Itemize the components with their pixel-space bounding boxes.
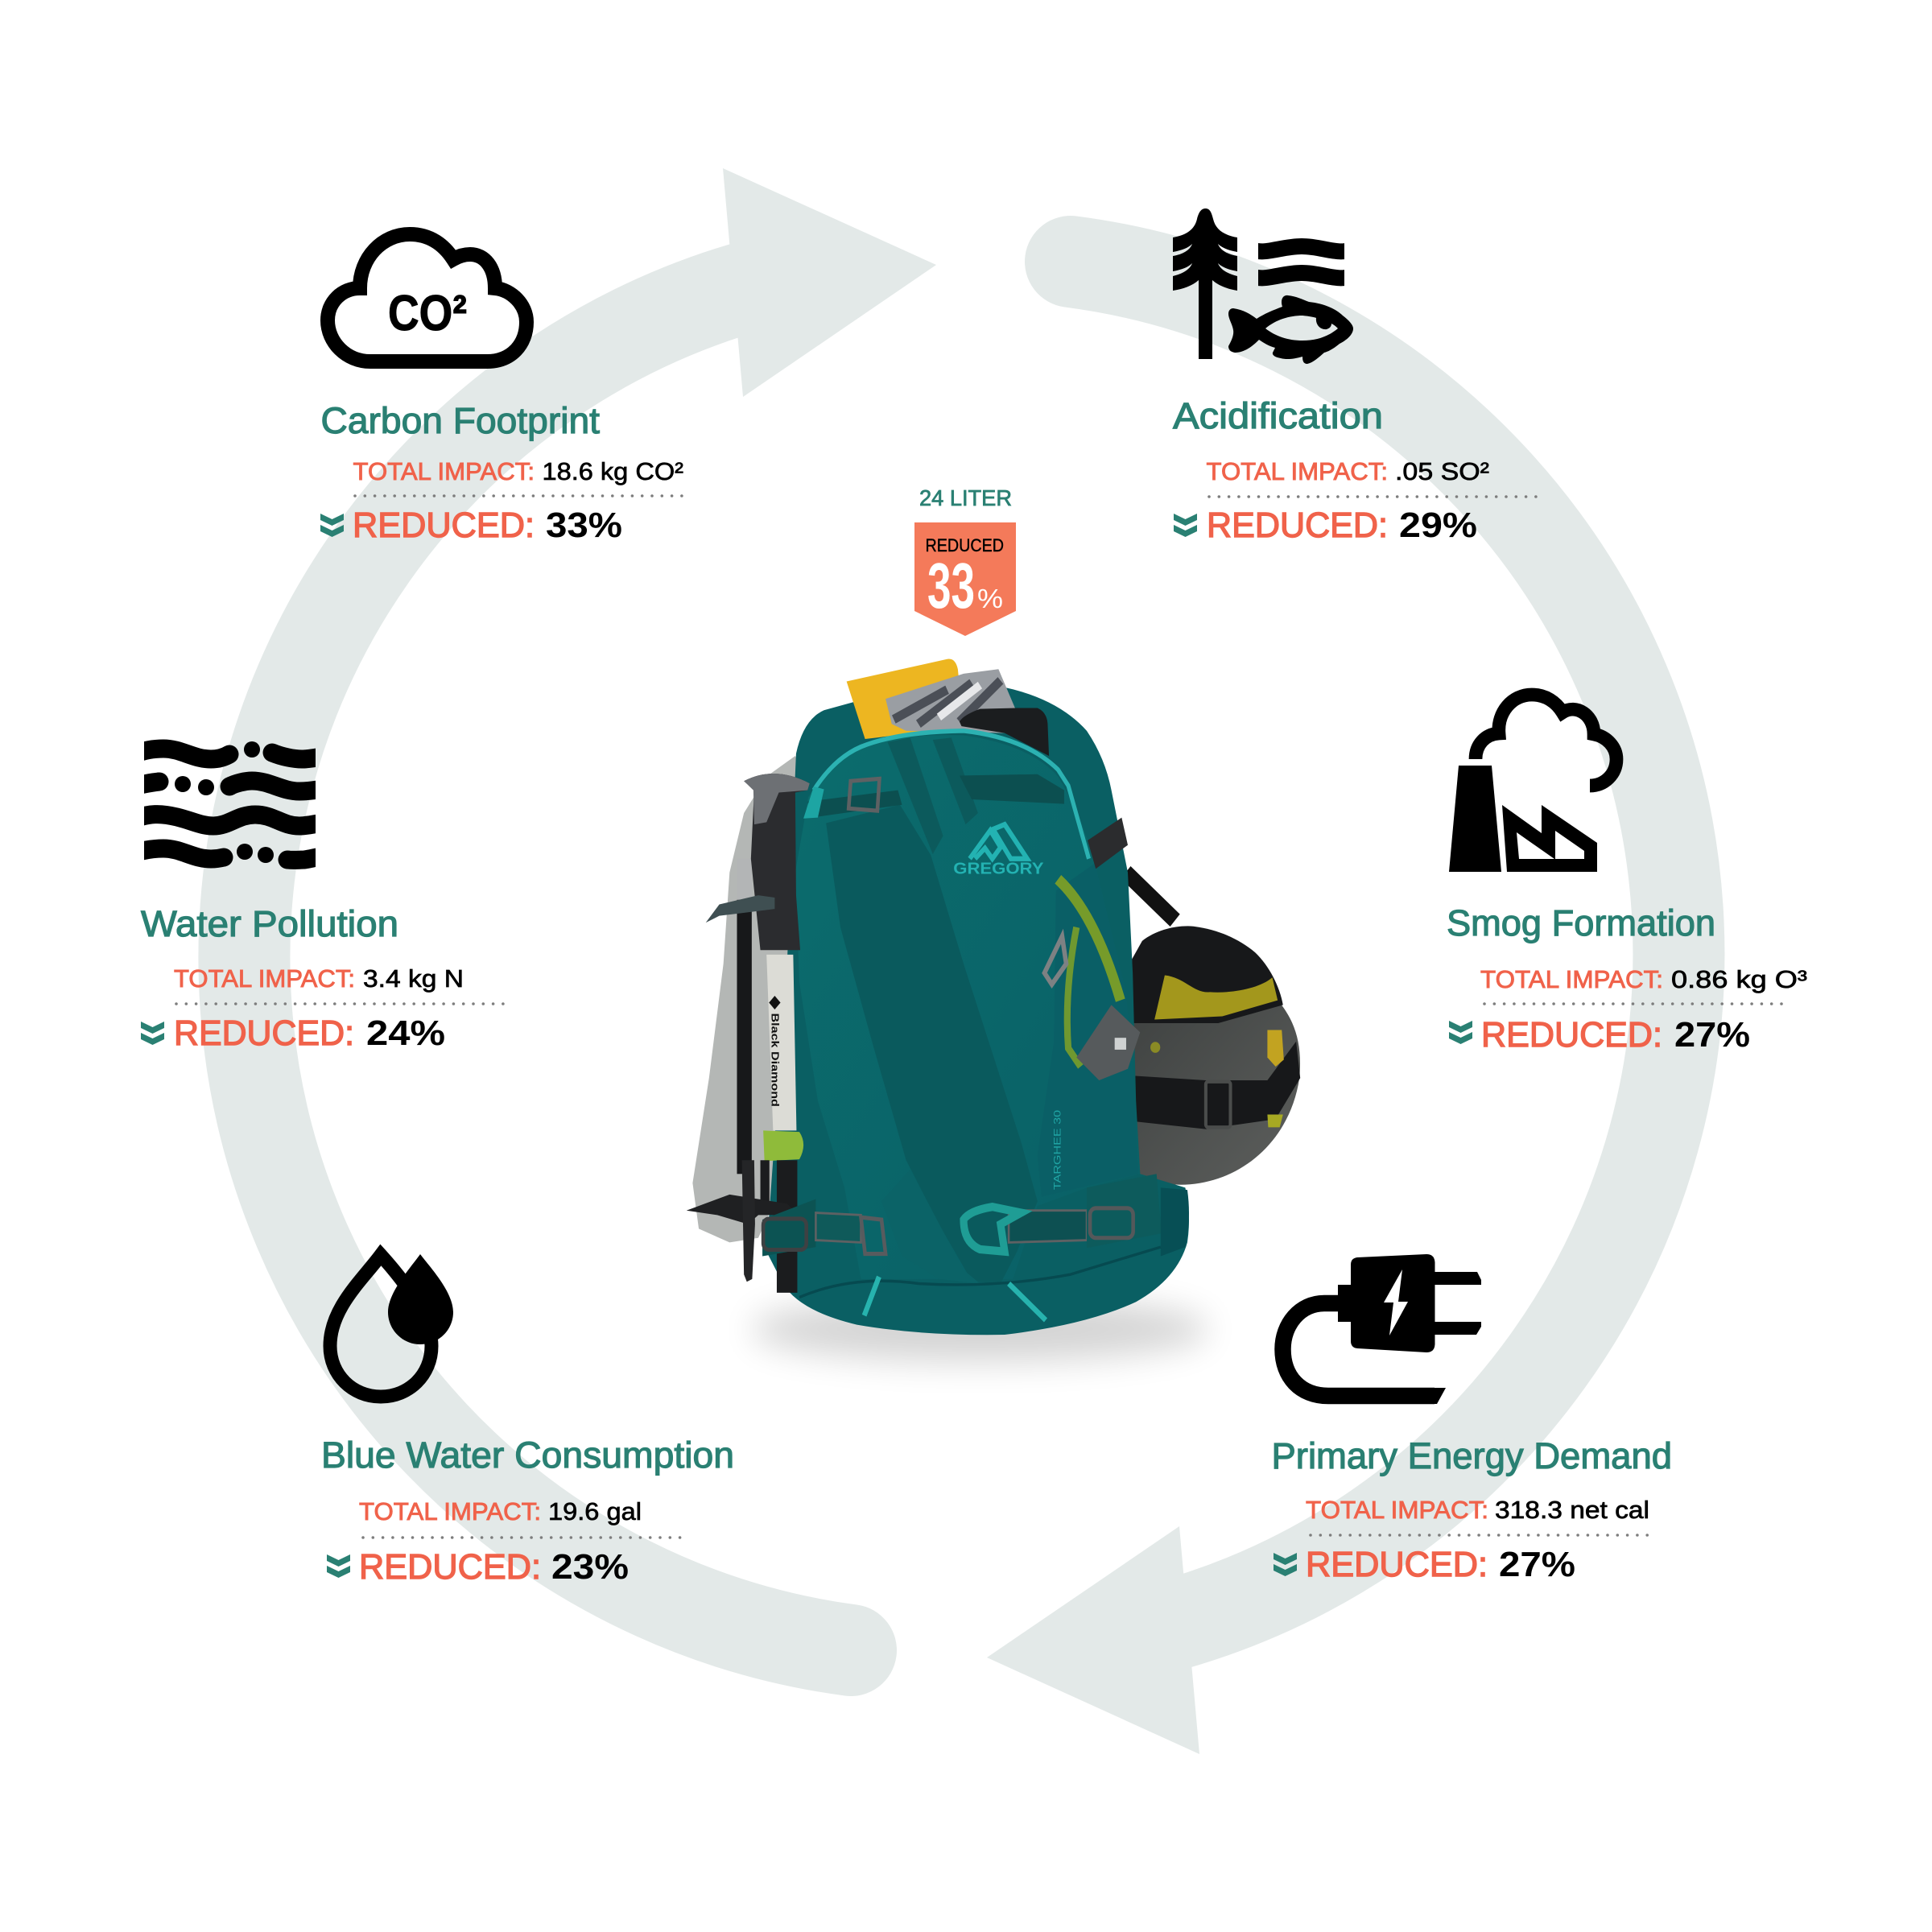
gregory logo (953, 824, 1044, 878)
total impact value: .05 SO² (1395, 457, 1489, 485)
total impact value: 3.4 kg N (363, 964, 464, 993)
heading: Acidification (1173, 395, 1383, 436)
reduced value: 23% (551, 1547, 629, 1587)
trekking pole: Black Diamond (769, 1013, 781, 1107)
pull tabs (865, 1277, 1046, 1320)
total impact label: TOTAL IMPACT: (359, 1497, 541, 1525)
total impact value: 318.3 net cal (1495, 1496, 1649, 1524)
gregory logo: GREGORY (953, 860, 1044, 878)
badge: reduced 33%: 33 (927, 550, 975, 621)
total impact label: TOTAL IMPACT: (353, 457, 535, 485)
total impact label: TOTAL IMPACT: (174, 964, 355, 993)
icon: water drops (330, 1254, 453, 1397)
side buckle (1088, 818, 1128, 869)
bottom fold (799, 1247, 1161, 1298)
panel: acidification (1173, 208, 1538, 545)
icon: chevrons (1174, 514, 1197, 537)
icon: chevrons (320, 514, 344, 537)
heading: Carbon Footprint (320, 400, 600, 441)
carabiner (1044, 936, 1066, 985)
icon: chevrons (327, 1554, 350, 1578)
total impact label: TOTAL IMPACT: (1480, 965, 1663, 993)
horizontal straps (807, 774, 1064, 818)
panel: primary energy demand (1272, 1254, 1672, 1584)
front panel (795, 735, 1140, 1279)
badge: reduced 33% (914, 522, 1016, 636)
side strap (1125, 873, 1175, 920)
icon: CO2 cloud (328, 234, 526, 361)
heading: Smog Formation (1447, 902, 1715, 943)
reduced value: 29% (1399, 506, 1477, 545)
reduced label: REDUCED: (1306, 1545, 1488, 1584)
reduced value: 33% (546, 506, 622, 545)
reduced value: 27% (1499, 1545, 1575, 1584)
notebook (847, 659, 964, 739)
helmet (1130, 926, 1300, 1185)
total impact value: 18.6 kg CO² (543, 457, 683, 485)
lower overlap panel (881, 1170, 980, 1284)
total impact label: TOTAL IMPACT: (1306, 1496, 1488, 1524)
panel: carbon footprint (320, 234, 685, 545)
panel: smog formation (1447, 695, 1807, 1055)
beanie (886, 669, 1017, 733)
total impact value: 19.6 gal (548, 1497, 642, 1525)
reduced label: REDUCED: (1481, 1015, 1662, 1055)
reduced label: REDUCED: (353, 506, 535, 545)
cycle arrow: right arc (987, 262, 1678, 1754)
icon: chevrons (141, 1022, 164, 1045)
diagonal straps (888, 737, 978, 854)
panel: blue water consumption (321, 1254, 734, 1587)
strap buckle (848, 778, 879, 811)
icon: chevrons (1449, 1021, 1472, 1044)
badge: reduced 33%: REDUCED (926, 535, 1004, 555)
waist strap (762, 1174, 1189, 1256)
headlamp (1076, 1005, 1140, 1080)
trekking pole (687, 774, 810, 1293)
icon: factory and smog cloud (1449, 695, 1616, 872)
zip rim (814, 731, 1089, 859)
teal zip tab (803, 786, 824, 819)
icon: tree, waves and fish (1173, 208, 1354, 364)
badge: reduced 33%: % (977, 584, 1003, 613)
icon: polluted water (133, 741, 322, 869)
reduced label: REDUCED: (359, 1547, 541, 1587)
model label: TARGHEE 30 (1051, 1110, 1063, 1190)
icon: chevrons (1274, 1553, 1297, 1576)
total impact label: TOTAL IMPACT: (1206, 457, 1388, 485)
reduced value: 24% (366, 1013, 445, 1053)
dark mesh panel (826, 805, 1038, 1284)
illustration: loaded backpack (687, 659, 1300, 1361)
heading: Water Pollution (141, 903, 398, 944)
heading: Primary Energy Demand (1272, 1435, 1672, 1476)
size label: 24 LITER (919, 485, 1012, 510)
icon: electric plug (1283, 1254, 1481, 1404)
infographic canvas (140, 168, 1807, 1754)
green cord (1058, 879, 1121, 1001)
reduced value: 27% (1674, 1015, 1750, 1055)
gray sweater (692, 756, 807, 1242)
heading: Blue Water Consumption (321, 1435, 734, 1476)
cycle arrow: left arc (244, 168, 936, 1650)
total impact value: 0.86 kg O³ (1671, 965, 1807, 993)
reduced label: REDUCED: (1207, 506, 1388, 545)
reduced label: REDUCED: (174, 1013, 354, 1053)
side pocket (1038, 863, 1138, 1197)
icon: CO2 cloud: CO² (388, 286, 467, 341)
panel: water pollution (133, 741, 506, 1053)
pack body (766, 687, 1189, 1335)
black bottle (960, 708, 1049, 756)
